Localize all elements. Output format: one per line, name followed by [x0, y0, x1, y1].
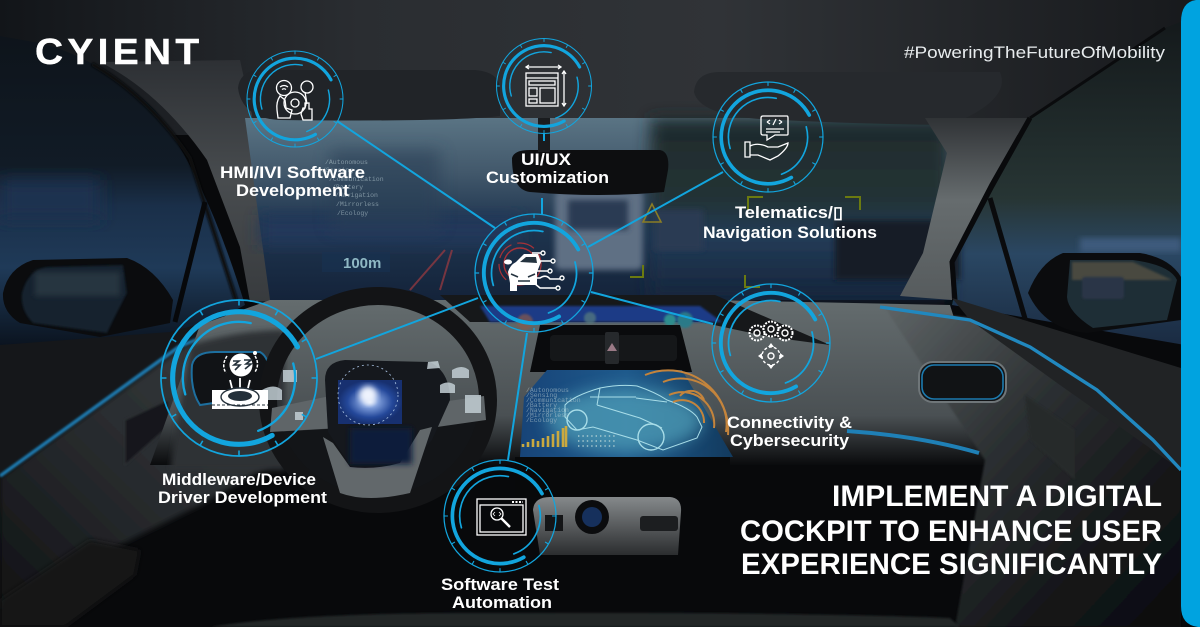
- seat hint: [210, 613, 960, 627]
- label: UI/UX Customization: Customization: [486, 169, 609, 187]
- icon: gears and directional target: [750, 322, 792, 369]
- right pillar: [900, 118, 1027, 300]
- ring: [713, 82, 823, 192]
- right door: [885, 308, 1181, 627]
- left door panel: [0, 345, 270, 610]
- logo: CYIENT: CYIENT: [35, 31, 203, 72]
- steering wheel: [268, 296, 488, 504]
- connector lines: [316, 121, 723, 460]
- below screen console: [515, 457, 730, 497]
- hashtag: #PoweringTheFutureOfMobility: [904, 43, 1166, 62]
- title: [740, 480, 1162, 581]
- wheel spokes: [270, 395, 486, 432]
- title: COCKPIT TO ENHANCE USER: [740, 515, 1162, 548]
- rear-view mirror: [512, 150, 668, 195]
- centre console and vents: [530, 325, 692, 372]
- screen list: /Communication: [526, 397, 581, 404]
- icon: globe over hardware chip: [212, 351, 268, 409]
- left door handle: [125, 400, 170, 465]
- HUD distance box: [322, 252, 390, 272]
- dash hood: [440, 295, 830, 345]
- title: IMPLEMENT A DIGITAL: [832, 480, 1162, 513]
- left mirror: [3, 258, 173, 337]
- ring: [712, 284, 830, 402]
- left air vent: [192, 352, 270, 405]
- icon: steering wheel with hands: [276, 80, 313, 120]
- HUD list: /Communication: [329, 176, 384, 183]
- ring: [496, 38, 592, 133]
- sun visors: [238, 70, 500, 120]
- left door upper sill: [0, 305, 270, 478]
- screen orange arcs: [645, 370, 728, 435]
- ring: [475, 214, 593, 332]
- hub glowing screen: [338, 380, 402, 424]
- label: Middleware/Device Driver Development: [158, 471, 328, 507]
- node: UI/UX Customization: [496, 38, 592, 133]
- label: HMI/IVI Software Development: HMI/IVI Software: [220, 164, 365, 182]
- label: Connectivity & Cybersecurity: Connectivity &: [727, 414, 852, 432]
- label: UI/UX Customization: [486, 151, 609, 187]
- label: Software Test Automation: Automation: [452, 594, 552, 612]
- label: Software Test Automation: [441, 576, 560, 612]
- node: Telematics/Navigation Solutions: [713, 82, 823, 192]
- label: Software Test Automation: Software Test: [441, 576, 560, 594]
- label: Connectivity & Cybersecurity: Cybersecurity: [730, 432, 850, 450]
- ring: [247, 51, 343, 147]
- HUD list: /Battery: [332, 184, 363, 191]
- label: Telematics/ Navigation Solutions: Navigation Solutions: [703, 224, 877, 242]
- HUD distance box: 100m: [343, 255, 381, 272]
- HUD list: [322, 159, 384, 217]
- node: Middleware/Device Driver Development: [161, 300, 317, 456]
- right air vent: [919, 362, 1006, 402]
- screen list: /Autonomous: [526, 387, 569, 394]
- ceiling: [0, 0, 1200, 135]
- label: Telematics/ Navigation Solutions: Telematics/▯: [735, 204, 843, 222]
- icon: connected car: [499, 243, 564, 291]
- windshield: [245, 118, 950, 300]
- road traffic: [555, 190, 643, 270]
- right mirror: [1028, 253, 1181, 333]
- screen list: /Battery: [526, 402, 557, 409]
- wheel lower U frame: [323, 427, 432, 498]
- wheel digital badges: [262, 361, 481, 420]
- node: HMI/IVI Software Development: [247, 51, 343, 147]
- screen list: [526, 387, 581, 424]
- screen yellow bars: [523, 426, 566, 447]
- screen list: /Ecology: [526, 417, 557, 424]
- icon: code window and magnifier: [477, 499, 526, 535]
- label: Middleware/Device Driver Development: Driver Development: [158, 489, 328, 507]
- HUD list: /Navigation: [335, 192, 378, 199]
- icon: window layout with arrows: [526, 65, 566, 106]
- label: HMI/IVI Software Development: [220, 164, 365, 200]
- screen list: /Mirrorless: [526, 412, 569, 419]
- label: HMI/IVI Software Development: Development: [236, 182, 350, 200]
- left pillar: [100, 60, 300, 302]
- node: Software Test Automation: [444, 460, 556, 572]
- label: Middleware/Device Driver Development: Middleware/Device: [162, 471, 316, 489]
- icon: code bubble over hand: [745, 116, 788, 160]
- label: Telematics/ Navigation Solutions: [703, 204, 877, 242]
- left side window: [0, 36, 245, 345]
- HUD warning triangle: [643, 204, 661, 222]
- screen car outline: [565, 385, 702, 450]
- title: EXPERIENCE SIGNIFICANTLY: [741, 548, 1162, 581]
- HUD list: /Ecology: [337, 210, 368, 217]
- dashboard: [150, 300, 1000, 465]
- label: Connectivity & Cybersecurity: [727, 414, 852, 450]
- node: central digital cockpit: [475, 214, 593, 332]
- right side window: [952, 20, 1185, 345]
- right accent bar: [1181, 0, 1200, 627]
- HUD brackets: [630, 197, 860, 287]
- screen dot grid: [578, 436, 616, 446]
- screen list: /Sensing: [526, 392, 557, 399]
- steering wheel dark lower interior: [272, 420, 486, 505]
- hub dark navy: [350, 428, 412, 464]
- right door handle: [1025, 395, 1075, 480]
- left trim: [0, 320, 250, 476]
- node: Connectivity & Cybersecurity: [712, 284, 830, 402]
- centre touch screen: [520, 370, 733, 457]
- HUD list: /Sensing: [322, 167, 353, 174]
- screen list: /Navigation: [526, 407, 569, 414]
- wheel hub: [325, 360, 450, 465]
- ring: [444, 460, 556, 572]
- armrest: [0, 540, 140, 627]
- label: UI/UX Customization: UI/UX: [521, 151, 571, 169]
- HUD list: /Autonomous: [325, 159, 368, 166]
- HUD list: /Mirrorless: [336, 201, 379, 208]
- ring: [161, 300, 317, 456]
